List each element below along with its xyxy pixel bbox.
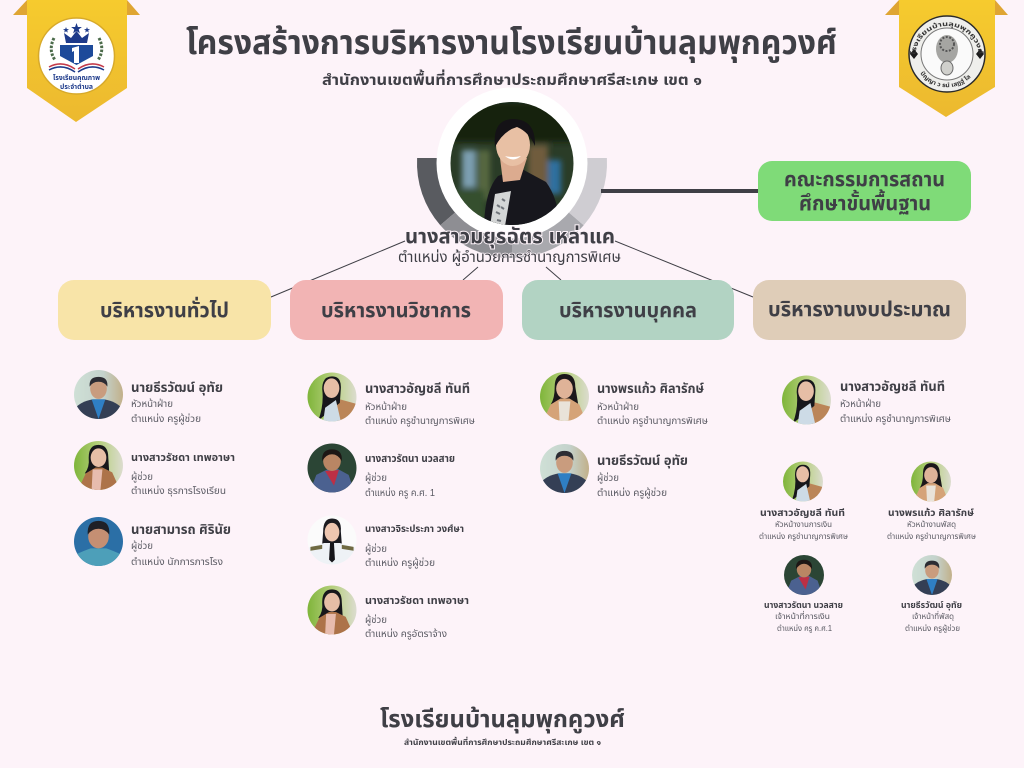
left ribbon badge: quality school logo xyxy=(13,0,140,122)
left ribbon badge: quality school logo: โรงเรียนคุณภาพ xyxy=(53,74,100,83)
footer school name: โรงเรียนบ้านลุมพุกคูวงศ์ xyxy=(380,705,625,734)
person: budget head: ตำแหน่ง ครูชำนาญการพิเศษ xyxy=(840,412,952,425)
footer office name: สำนักงานเขตพื้นที่การศึกษาประถมศึกษาศรีสะเกษ เขต ๑ xyxy=(404,736,601,747)
person: supplies head: นางพรแก้ว ศิลารักษ์ xyxy=(888,506,974,519)
title: โครงสร้างการบริหารงานโรงเรียนบ้านลุมพุกคูวงศ์ xyxy=(186,24,837,63)
person: academic 2: ผู้ช่วย xyxy=(365,471,387,484)
person: finance officer xyxy=(764,555,843,634)
person: academic 4 xyxy=(308,586,469,640)
director portrait xyxy=(436,88,588,238)
person: general 2: นางสาวรัชดา เทพอาษา xyxy=(131,452,235,464)
department box: general administration: บริหารงานทั่วไป xyxy=(100,297,229,322)
person: general 3: นายสามารถ ศิรินัย xyxy=(131,522,231,537)
person: personnel 1: นางพรแก้ว ศิลารักษ์ xyxy=(597,381,704,396)
person: general 1 xyxy=(74,370,223,425)
person: personnel 1 xyxy=(540,372,709,427)
connector lines to department boxes xyxy=(271,241,753,297)
person: budget head xyxy=(782,376,952,425)
committee box: คณะกรรมการสถาน xyxy=(784,169,945,191)
person: finance officer: ตำแหน่ง ครู ค.ศ.1 xyxy=(777,623,833,634)
person: budget head: หัวหน้าฝ่าย xyxy=(840,398,881,410)
department box: general administration xyxy=(58,280,271,340)
person: academic 2: ตำแหน่ง ครู ค.ศ. 1 xyxy=(365,486,435,499)
person: supplies officer: เจ้าหน้าที่พัสดุ xyxy=(912,610,954,621)
person: supplies officer: ตำแหน่ง ครูผู้ช่วย xyxy=(905,623,960,634)
line to committee box xyxy=(601,189,760,193)
director position: ตำแหน่ง ผู้อำนวยการชำนาญการพิเศษ xyxy=(398,248,621,266)
person: academic 3: ตำแหน่ง ครูผู้ช่วย xyxy=(365,556,435,569)
department box: academic administration xyxy=(290,280,503,340)
person: general 1: นายธีรวัฒน์ อุทัย xyxy=(131,380,223,395)
person: general 3: ผู้ช่วย xyxy=(131,539,153,552)
left ribbon badge: quality school logo: ประจำตำบล xyxy=(60,83,93,91)
person: supplies head: ตำแหน่ง ครูชำนาญการพิเศษ xyxy=(887,531,976,542)
department box: budget administration xyxy=(753,280,966,340)
person: academic 3: นางสาวจิระประภา วงศ์ษา xyxy=(365,524,464,535)
person: academic 4: ผู้ช่วย xyxy=(365,613,387,626)
department box: personnel administration xyxy=(522,280,734,340)
person: personnel 2 xyxy=(540,444,688,499)
person: personnel 1: ตำแหน่ง ครูชำนาญการพิเศษ xyxy=(597,414,709,427)
person: academic 4: นางสาวรัชดา เทพอาษา xyxy=(365,595,469,607)
person: academic 1: นางสาวอัญชลี ทันที xyxy=(365,381,470,396)
person: supplies officer: นายธีรวัฒน์ อุทัย xyxy=(901,600,962,610)
person: personnel 2: ตำแหน่ง ครูผู้ช่วย xyxy=(597,486,667,499)
person: supplies officer xyxy=(901,555,962,634)
ring around director portrait xyxy=(417,158,607,258)
person: finance head xyxy=(759,462,848,542)
right ribbon badge: school seal xyxy=(885,0,1008,117)
person: academic 4: ตำแหน่ง ครูอัตราจ้าง xyxy=(365,627,447,640)
person: academic 2 xyxy=(308,444,455,499)
right ribbon badge: school seal: ปัญญา ว ธนํ เสฏฐํ โล xyxy=(920,70,971,88)
subtitle: สำนักงานเขตพื้นที่การศึกษาประถมศึกษาศรีสะเกษ เขต ๑ xyxy=(322,69,702,89)
person: general 1: ตำแหน่ง ครูผู้ช่วย xyxy=(131,412,201,425)
person: personnel 2: ผู้ช่วย xyxy=(597,471,619,484)
person: general 3 xyxy=(74,517,231,568)
department box: budget administration: บริหารงานงบประมาณ xyxy=(768,299,951,321)
person: finance head: นางสาวอัญชลี ทันที xyxy=(760,507,845,519)
department box: academic administration: บริหารงานวิชาการ xyxy=(321,300,471,322)
person: general 3: ตำแหน่ง นักการภารโรง xyxy=(131,555,223,568)
person: academic 1 xyxy=(308,372,476,427)
person: finance head: ตำแหน่ง ครูชำนาญการพิเศษ xyxy=(759,531,848,542)
person: academic 1: หัวหน้าฝ่าย xyxy=(365,401,407,413)
person: supplies head: หัวหน้างานพัสดุ xyxy=(907,519,956,529)
director name: นางสาวมยุรฉัตร เหล่าแค xyxy=(405,226,615,248)
person: general 2: ผู้ช่วย xyxy=(131,470,153,483)
person: academic 1: ตำแหน่ง ครูชำนาญการพิเศษ xyxy=(365,414,476,427)
right ribbon badge: school seal: โรงเรียนบ้านลุมพุกคูวงศ์ xyxy=(910,22,984,54)
person: personnel 1: หัวหน้าฝ่าย xyxy=(597,401,639,413)
person: finance head: หัวหน้างานการเงิน xyxy=(775,519,832,529)
committee box xyxy=(758,161,971,221)
committee box: ศึกษาขั้นพื้นฐาน xyxy=(799,189,931,215)
person: general 2 xyxy=(74,441,235,497)
person: personnel 2: นายธีรวัฒน์ อุทัย xyxy=(597,453,688,468)
person: academic 2: นางสาวรัตนา นวลสาย xyxy=(365,453,455,465)
person: academic 3: ผู้ช่วย xyxy=(365,542,387,555)
person: finance officer: นางสาวรัตนา นวลสาย xyxy=(764,600,843,610)
person: supplies head xyxy=(887,462,976,542)
person: general 1: หัวหน้าฝ่าย xyxy=(131,398,173,410)
person: finance officer: เจ้าหน้าที่การเงิน xyxy=(775,610,830,621)
department box: personnel administration: บริหารงานบุคคล xyxy=(559,300,697,322)
person: general 2: ตำแหน่ง ธุรการโรงเรียน xyxy=(131,484,226,497)
person: budget head: นางสาวอัญชลี ทันที xyxy=(840,379,945,394)
person: academic 3 xyxy=(308,516,464,569)
